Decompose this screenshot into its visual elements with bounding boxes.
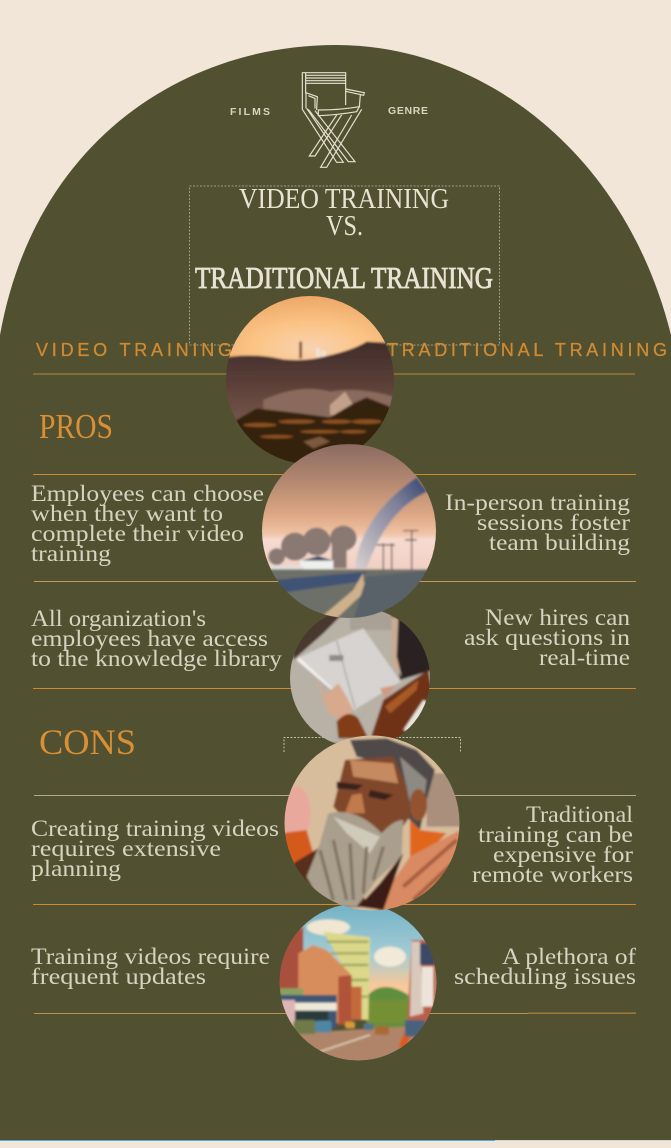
- title: VIDEO TRAINING: [239, 183, 449, 215]
- bottom edge stripe: [0, 1140, 671, 1141]
- text: knowledge library: employees have access: [31, 626, 268, 652]
- photo: bearded holy man: [280, 733, 467, 913]
- text: choose when: Employees can choose: [31, 481, 264, 507]
- photo: mountain ridge at sunset: [226, 296, 394, 462]
- column heading: traditional training: TRADITIONAL TRAINING: [387, 340, 667, 360]
- text: team building: In-person training: [445, 490, 630, 516]
- divider lines: [33, 374, 636, 1014]
- text: team building: sessions foster: [477, 510, 630, 536]
- photo: tornado over a road: [253, 443, 440, 623]
- label: genre: GENRE: [388, 105, 428, 117]
- photo: person reading a book: [290, 612, 430, 744]
- heading: cons: CONS: [39, 722, 136, 762]
- text: team building: team building: [489, 530, 630, 556]
- text: remote workers: remote workers: [472, 862, 633, 888]
- label: films: FILMS: [230, 106, 270, 118]
- photo: vintage street postcard: [280, 905, 436, 1060]
- dashed title frame: [190, 186, 500, 345]
- text: scheduling issues: A plethora of: [502, 944, 636, 970]
- text: knowledge library: [31, 606, 282, 672]
- text: team building: [445, 490, 630, 556]
- text: remote workers: [472, 802, 633, 888]
- text: knowledge library: to the knowledge library: [31, 646, 282, 672]
- text: remote workers: training can be: [478, 822, 633, 848]
- icon: director chair: [302, 73, 364, 167]
- text: scheduling issues: scheduling issues: [454, 964, 636, 990]
- text: real-time questions: real-time: [539, 645, 630, 671]
- title: [195, 183, 493, 295]
- text: extensive planning: Creating training videos: [31, 816, 279, 842]
- text: knowledge library: All organization's: [31, 606, 206, 632]
- text: frequent updates: [31, 944, 270, 990]
- heading: pros: PROS: [39, 407, 113, 446]
- column heading: video training: VIDEO TRAINING: [36, 340, 232, 360]
- dashed bracket: [284, 738, 460, 752]
- text: frequent updates: frequent updates: [31, 964, 206, 990]
- text: choose when: [31, 481, 264, 567]
- text: remote workers: expensive for: [493, 842, 633, 868]
- text: real-time questions: ask questions in: [464, 625, 630, 651]
- title: VS.: [326, 210, 363, 242]
- text: scheduling issues: [454, 944, 636, 990]
- text: real-time questions: New hires can: [485, 605, 630, 631]
- text: remote workers: Traditional: [526, 802, 633, 828]
- text: extensive planning: planning: [31, 856, 121, 882]
- title: TRADITIONAL TRAINING: [195, 260, 493, 295]
- text: extensive planning: [31, 816, 279, 882]
- text: real-time questions: [464, 605, 630, 671]
- text: frequent updates: Training videos require: [31, 944, 270, 970]
- text: choose when: when they want to: [31, 501, 223, 527]
- text: choose when: training: [31, 541, 111, 567]
- text: choose when: complete their video: [31, 521, 244, 547]
- text: extensive planning: requires extensive: [31, 836, 221, 862]
